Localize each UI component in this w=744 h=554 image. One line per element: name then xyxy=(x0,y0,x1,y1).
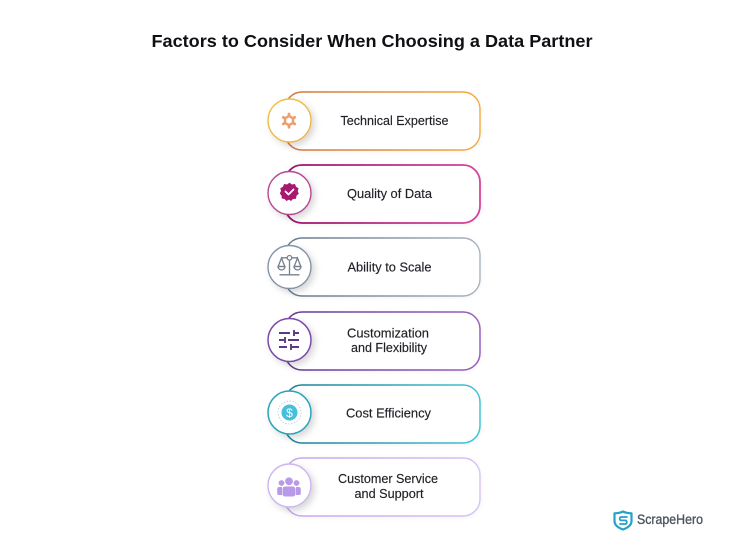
icon: shield xyxy=(614,512,632,530)
card outline xyxy=(285,458,480,516)
label: Customer Service xyxy=(338,472,438,486)
card outline xyxy=(285,238,480,296)
wordmark: ScrapeHero xyxy=(637,512,703,527)
icon circle xyxy=(268,318,311,362)
icon circle xyxy=(268,172,311,214)
card outline xyxy=(285,312,480,370)
icon circle xyxy=(268,464,311,507)
card outline xyxy=(285,165,480,223)
label: Cost Efficiency xyxy=(346,406,432,420)
icon circle xyxy=(268,99,311,142)
title: Factors to Consider When Choosing a Data Partner xyxy=(152,31,593,51)
card outline xyxy=(285,385,480,443)
icon: gear xyxy=(283,114,295,127)
factor: Quality of Data xyxy=(268,165,480,223)
label: Ability to Scale xyxy=(348,260,432,274)
factor: Technical Expertise xyxy=(268,92,480,150)
factor: Cost Efficiency xyxy=(268,385,480,443)
label: Quality of Data xyxy=(347,187,432,201)
icon: sliders xyxy=(279,330,299,350)
icon: dollar coin: $ xyxy=(286,406,293,420)
icon circle xyxy=(268,391,311,434)
logo: ScrapeHero xyxy=(614,512,703,530)
icon: verified badge xyxy=(280,183,299,201)
icon: people group xyxy=(277,477,301,496)
label: Technical Expertise xyxy=(340,114,449,128)
label: Customization xyxy=(347,326,429,340)
factor: Customer Service and Support xyxy=(268,458,480,516)
factor: Ability to Scale xyxy=(268,238,480,296)
label line 2: and Support xyxy=(354,487,424,501)
icon circle xyxy=(268,246,311,288)
label line 2: and Flexibility xyxy=(351,341,428,355)
card outline xyxy=(285,92,480,150)
factor: Customization and Flexibility xyxy=(268,312,480,370)
icon: balance scale xyxy=(278,255,301,275)
icon: dollar coin xyxy=(278,401,301,424)
